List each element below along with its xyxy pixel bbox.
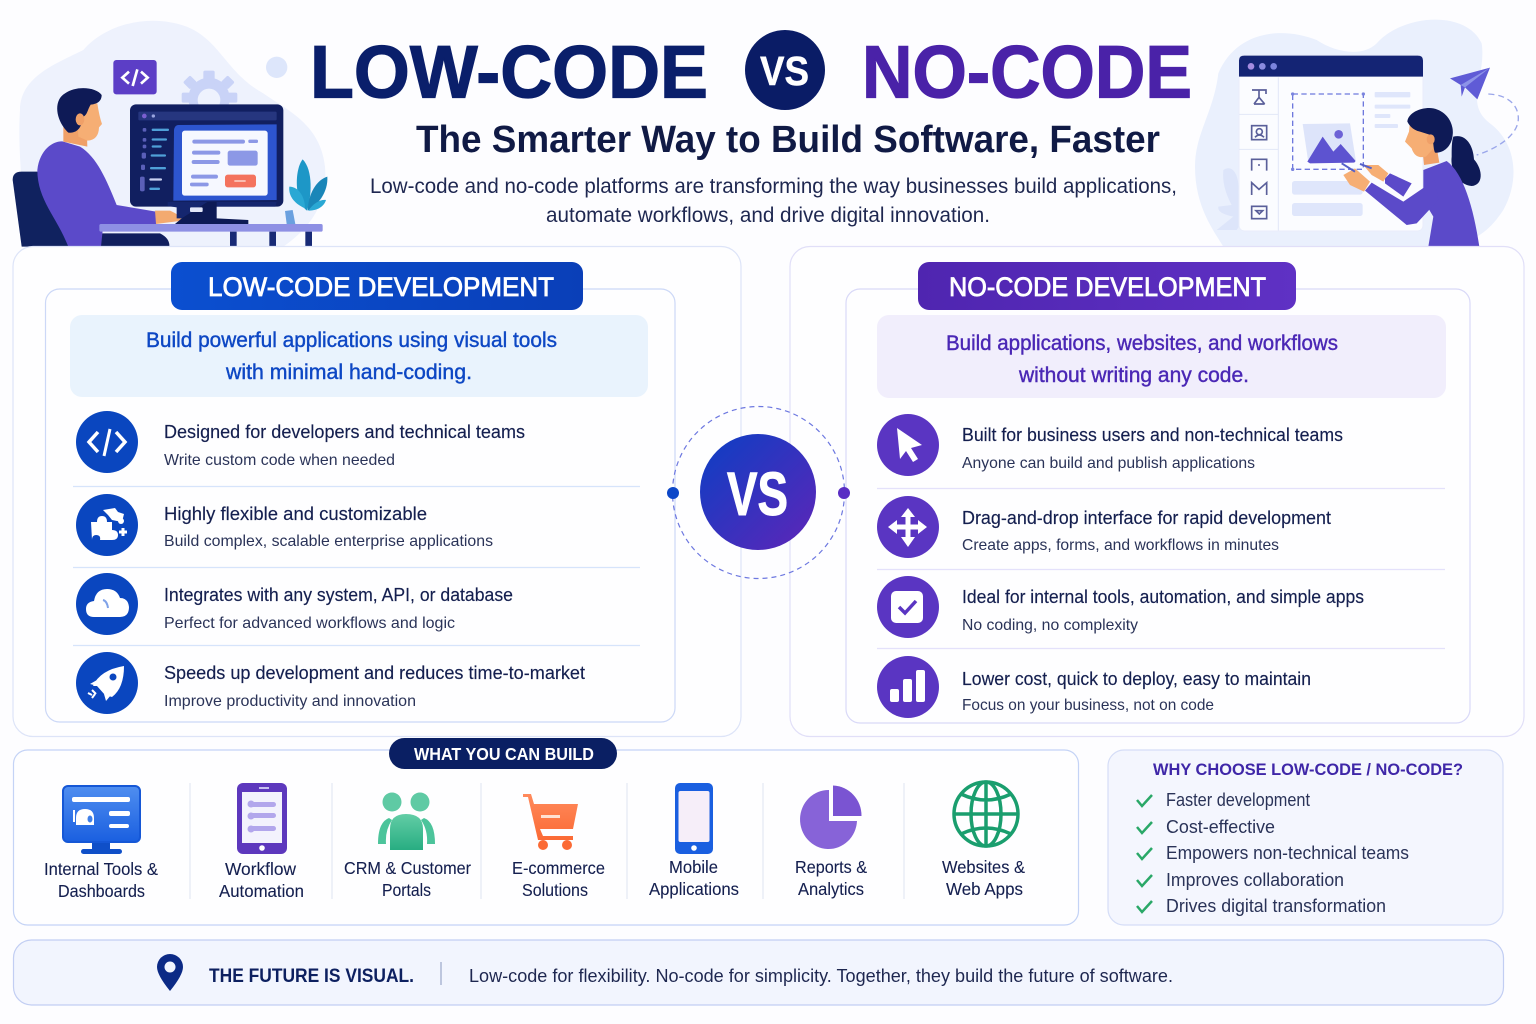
row: speeds up development: Speeds up development and reduces time-to-market bbox=[164, 662, 585, 683]
low-code heading pill bbox=[171, 262, 583, 310]
item: websites: Web Apps bbox=[946, 879, 1023, 899]
why choose heading: WHY CHOOSE LOW-CODE / NO-CODE? bbox=[1153, 760, 1463, 779]
intro text bbox=[370, 175, 1177, 227]
panel: what you can build bbox=[14, 738, 1078, 925]
row: ideal for internal tools: Ideal for internal tools, automation, and simple apps bbox=[962, 586, 1364, 607]
row: drag-and-drop bbox=[877, 496, 1331, 558]
row: flexible and customizable bbox=[76, 494, 493, 556]
row: built for business users bbox=[877, 414, 1343, 476]
VS center badge: VS bbox=[727, 460, 788, 528]
item: websites: Websites & bbox=[942, 857, 1025, 877]
no-code tagline bbox=[877, 315, 1446, 398]
no-code tagline: without writing any code. bbox=[1018, 364, 1249, 387]
benefits list: Cost-effective bbox=[1166, 816, 1275, 837]
row: designed for developers: Write custom code when needed bbox=[164, 452, 395, 469]
item: workflow automation: Workflow bbox=[225, 859, 296, 879]
row: lower cost: Lower cost, quick to deploy, easy to maintain bbox=[962, 668, 1311, 689]
intro text: Low-code and no-code platforms are transforming the way businesses build applications, bbox=[370, 175, 1177, 198]
benefits list: Empowers non-technical teams bbox=[1166, 842, 1409, 863]
benefits list: Faster development bbox=[1166, 789, 1310, 810]
intro text: automate workflows, and drive digital innovation. bbox=[546, 204, 990, 227]
no-code tagline: Build applications, websites, and workflows bbox=[946, 332, 1338, 355]
item: workflow automation: Automation bbox=[219, 881, 304, 901]
item: internal tools: Dashboards bbox=[58, 881, 145, 901]
row: ideal for internal tools bbox=[877, 576, 1364, 638]
row: flexible and customizable: Build complex, scalable enterprise applications bbox=[164, 533, 493, 550]
benefits list bbox=[1166, 789, 1409, 916]
footer heading: THE FUTURE IS VISUAL. bbox=[209, 965, 414, 987]
item: e-commerce: E-commerce bbox=[512, 858, 605, 878]
row: integrates with any system bbox=[76, 573, 513, 635]
no-code heading pill: NO-CODE DEVELOPMENT bbox=[949, 272, 1266, 302]
low-code tagline: Build powerful applications using visual tools bbox=[146, 329, 557, 352]
row: speeds up development: Improve productivity and innovation bbox=[164, 693, 416, 710]
row: drag-and-drop: Drag-and-drop interface for rapid development bbox=[962, 507, 1331, 528]
row: built for business users: Built for business users and non-technical teams bbox=[962, 424, 1343, 445]
item: e-commerce: Solutions bbox=[522, 880, 588, 900]
footer banner bbox=[14, 940, 1504, 1005]
row: integrates with any system: Integrates with any system, API, or database bbox=[164, 584, 513, 605]
low-code tagline bbox=[70, 315, 648, 397]
low-code tagline: with minimal hand-coding. bbox=[225, 361, 472, 384]
item: e-commerce bbox=[512, 794, 605, 900]
illustration: developer at computer bbox=[13, 21, 327, 247]
row: integrates with any system: Perfect for advanced workflows and logic bbox=[164, 615, 455, 632]
panel: low-code development bbox=[13, 246, 741, 736]
item: mobile applications: Mobile bbox=[669, 857, 718, 877]
item: CRM bbox=[344, 792, 471, 900]
subtitle: The Smarter Way to Build Software, Faster bbox=[416, 119, 1160, 161]
row: designed for developers: Designed for developers and technical teams bbox=[164, 421, 525, 442]
VS center badge bbox=[667, 406, 850, 578]
row: drag-and-drop: Create apps, forms, and workflows in minutes bbox=[962, 537, 1279, 554]
what you can build pill: WHAT YOU CAN BUILD bbox=[414, 744, 594, 764]
row: speeds up development bbox=[76, 652, 585, 714]
no-code heading pill bbox=[918, 262, 1296, 310]
footer message: Low-code for flexibility. No-code for simplicity. Together, they build the future of software. bbox=[469, 965, 1173, 986]
what you can build pill bbox=[389, 738, 617, 769]
icon: location pin bbox=[157, 954, 183, 991]
item: CRM: Portals bbox=[382, 880, 431, 900]
row: ideal for internal tools: No coding, no complexity bbox=[962, 617, 1138, 634]
panel: why choose low-code / no-code bbox=[1108, 750, 1503, 925]
VS badge in title: VS bbox=[760, 48, 809, 94]
item: workflow automation bbox=[219, 783, 304, 901]
check marks bbox=[1137, 795, 1152, 912]
title bbox=[310, 30, 1192, 114]
VS badge in title bbox=[745, 30, 825, 110]
item: websites bbox=[942, 782, 1025, 899]
benefits list: Drives digital transformation bbox=[1166, 895, 1386, 916]
item: CRM: CRM & Customer bbox=[344, 858, 471, 878]
item: reports and analytics bbox=[795, 786, 867, 899]
row: lower cost bbox=[877, 656, 1311, 718]
benefits list: Improves collaboration bbox=[1166, 869, 1344, 890]
row: designed for developers bbox=[76, 411, 525, 473]
item: reports and analytics: Analytics bbox=[798, 879, 864, 899]
item: reports and analytics: Reports & bbox=[795, 857, 867, 877]
row: built for business users: Anyone can build and publish applications bbox=[962, 455, 1255, 472]
item: mobile applications bbox=[649, 783, 739, 899]
row: flexible and customizable: Highly flexible and customizable bbox=[164, 503, 427, 524]
title: NO-CODE bbox=[862, 30, 1192, 114]
row: lower cost: Focus on your business, not on code bbox=[962, 697, 1214, 714]
panel: no-code development bbox=[790, 246, 1524, 736]
item: internal tools bbox=[44, 786, 158, 901]
title: LOW-CODE bbox=[310, 30, 708, 114]
illustration: designer with drag-and-drop builder bbox=[1195, 20, 1518, 247]
item: internal tools: Internal Tools & bbox=[44, 859, 158, 879]
item: mobile applications: Applications bbox=[649, 879, 739, 899]
low-code heading pill: LOW-CODE DEVELOPMENT bbox=[208, 272, 554, 302]
